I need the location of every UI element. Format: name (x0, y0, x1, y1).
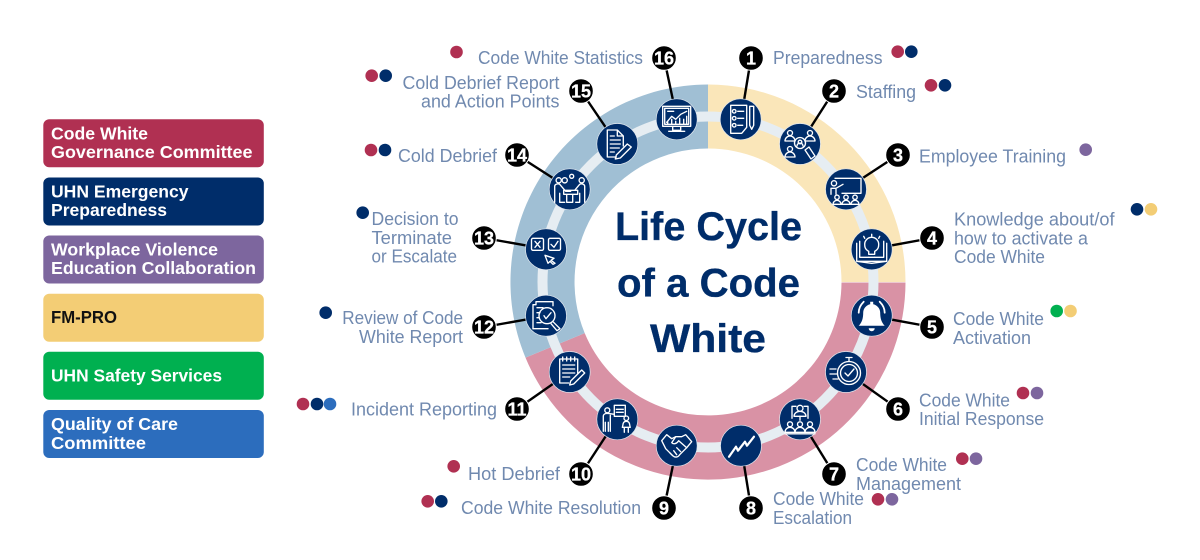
step 11: Incident Reporting (297, 352, 590, 421)
legend item: Workplace Violence Education Collaboration: Workplace Violence (51, 240, 218, 260)
step 9: Code White Resolution (421, 425, 697, 520)
owner dots (365, 144, 391, 156)
label: Code White Management: Code White (856, 454, 947, 475)
legend item: Code White Governance Committee (43, 119, 264, 167)
owner dots (1017, 387, 1043, 399)
owner dot (356, 206, 369, 219)
icon: command team (785, 405, 815, 434)
icon: decision boxes and cursor (532, 238, 560, 264)
label: Cold Debrief Report and Action Points: and Action Points (421, 91, 560, 112)
icon: book and light bulb (857, 234, 887, 263)
number badge 10 (569, 462, 593, 486)
step 1: Preparedness (720, 45, 918, 140)
legend item: Workplace Violence Education Collaboration (43, 236, 264, 284)
label: Review of Code White Report (342, 307, 463, 347)
owner dots (1050, 305, 1077, 317)
number badge 5 (920, 315, 944, 339)
number badge 3 (886, 143, 910, 167)
title: of a Code (617, 262, 800, 306)
icon: document and pen (607, 130, 631, 159)
number badge 14 (505, 143, 529, 167)
legend item: FM-PRO: FM-PRO (51, 307, 117, 327)
legend (43, 119, 264, 458)
number badge 3: 3 (893, 145, 903, 165)
number badge 5: 5 (927, 317, 937, 337)
number badge 4 (920, 226, 944, 250)
label: Knowledge about/of how to activate a Code White (954, 208, 1115, 267)
number badge 11 (505, 397, 529, 421)
icon: staff network (785, 130, 815, 159)
number badge 14: 14 (507, 145, 527, 165)
owner dot (450, 46, 463, 58)
ring segment: pink phase (526, 282, 906, 480)
label: Decision to Terminate or Escalate: Terminate (372, 227, 452, 248)
label: Code White Activation (953, 308, 1044, 348)
number badge 12 (472, 315, 496, 339)
number badge 15 (569, 79, 593, 103)
legend item: UHN Safety Services (43, 352, 264, 400)
label: Code White Management (856, 454, 961, 494)
icon: monitor with statistics (663, 106, 691, 131)
title (615, 205, 802, 361)
ring track (542, 116, 874, 448)
label: Code White Escalation (773, 488, 864, 528)
label: Knowledge about/of how to activate a Code White: how to activate a (954, 227, 1089, 248)
number badge 13: 13 (474, 228, 494, 248)
icon: notepad and pencil (560, 357, 585, 385)
step 12: Review of Code White Report (319, 295, 566, 347)
legend item: UHN Emergency Preparedness: UHN Emergency (51, 182, 189, 202)
legend item: UHN Emergency Preparedness: Preparedness (51, 200, 167, 220)
number badge 13 (472, 226, 496, 250)
label: Code White Resolution: Code White Resolution (461, 497, 641, 518)
icon: alarm bell (859, 302, 885, 331)
step 8: Code White Escalation (720, 425, 898, 528)
legend item: Quality of Care Committee (43, 410, 264, 458)
title: White (650, 317, 766, 361)
owner dots (365, 69, 392, 82)
label: Code White Initial Response: Initial Response (919, 408, 1044, 429)
label: Review of Code White Report: Review of Code (342, 307, 463, 328)
owner dots (925, 79, 951, 92)
step 13: Decision to Terminate or Escalate (356, 206, 566, 270)
step 4: Knowledge about/of how to activate a Code White (851, 203, 1157, 270)
label: Code White Activation: Code White (953, 308, 1044, 329)
label: Code White Management: Management (856, 473, 961, 494)
icon: two people at a chart (603, 405, 630, 432)
label: Code White Initial Response: Code White (919, 389, 1010, 410)
number badge 7 (822, 462, 846, 486)
label: Decision to Terminate or Escalate: or Escalate (372, 246, 457, 267)
label: Hot Debrief: Hot Debrief (468, 463, 561, 484)
owner dot (319, 306, 332, 319)
owner dots (1131, 203, 1157, 216)
label: Incident Reporting: Incident Reporting (351, 399, 497, 420)
label: Decision to Terminate or Escalate: Decision to (372, 208, 458, 229)
step 7: Code White Management (780, 399, 982, 494)
icon: classroom trainer (831, 178, 861, 204)
label: Code White Initial Response (919, 389, 1044, 429)
number badge 8: 8 (746, 498, 756, 518)
number badge 11: 11 (507, 399, 527, 419)
legend item: Workplace Violence Education Collaboration: Education Collaboration (51, 258, 256, 278)
label: Cold Debrief Report and Action Points: Cold Debrief Report (402, 72, 560, 93)
owner dots (421, 495, 448, 508)
legend item: UHN Emergency Preparedness (43, 178, 264, 226)
label: Code White Escalation: Escalation (773, 507, 852, 528)
label: Employee Training: Employee Training (919, 146, 1066, 167)
icon: document review magnifier (533, 302, 560, 331)
legend item: Quality of Care Committee: Quality of Care (51, 414, 178, 434)
label: Staffing: Staffing (856, 81, 916, 102)
title: Life Cycle (615, 205, 802, 249)
label: Cold Debrief: Cold Debrief (398, 145, 498, 166)
label: Code White Escalation: Code White (773, 488, 864, 509)
number badge 9: 9 (659, 498, 669, 518)
label: Preparedness: Preparedness (773, 47, 882, 68)
label: Knowledge about/of how to activate a Code White: Knowledge about/of (954, 208, 1115, 230)
owner dot (447, 460, 460, 473)
step 5: Code White Activation (851, 295, 1077, 348)
legend item: Code White Governance Committee: Governance Committee (51, 142, 253, 162)
owner dots (956, 452, 982, 465)
number badge 16 (652, 46, 676, 70)
legend item: Quality of Care Committee: Committee (51, 433, 146, 453)
number badge 6: 6 (893, 399, 903, 419)
label: Knowledge about/of how to activate a Code White: Code White (954, 246, 1045, 267)
ring: life cycle phases (510, 84, 906, 480)
step 3: Employee Training (826, 143, 1092, 210)
legend item: Code White Governance Committee: Code White (51, 124, 148, 144)
step 2: Staffing (780, 79, 951, 164)
icon: handshake (662, 435, 692, 457)
step 6: Code White Initial Response (826, 352, 1044, 429)
label: Cold Debrief Report and Action Points (402, 72, 560, 112)
number badge 8 (739, 496, 763, 520)
number badge 16: 16 (654, 48, 674, 68)
legend item: UHN Safety Services: UHN Safety Services (51, 366, 222, 386)
number badge 6 (886, 397, 910, 421)
label: Code White Activation: Activation (953, 327, 1031, 348)
number badge 15: 15 (571, 81, 591, 101)
ring segment: blue phase (510, 84, 708, 358)
number badge 2 (822, 79, 846, 103)
owner dot (1079, 143, 1092, 156)
number badge 12: 12 (474, 317, 494, 337)
owner dots (297, 398, 336, 410)
step 14: Cold Debrief (365, 143, 590, 210)
label: Code White Statistics: Code White Statistics (478, 47, 643, 68)
icon: checklist and pen (731, 105, 754, 133)
legend item: FM-PRO (43, 294, 264, 342)
number badge 10: 10 (571, 464, 591, 484)
icon: stopwatch (830, 358, 860, 384)
number badge 9 (652, 496, 676, 520)
step 16: Code White Statistics (450, 46, 697, 140)
step 15: Cold Debrief Report and Action Points (365, 69, 638, 164)
icon: rising zigzag line (729, 437, 754, 457)
number badge 4: 4 (927, 228, 937, 248)
step 10: Hot Debrief (447, 399, 638, 486)
number badge 1: 1 (746, 48, 756, 68)
owner dots (872, 493, 898, 506)
owner dots (891, 45, 918, 58)
label: Decision to Terminate or Escalate (372, 208, 458, 267)
ring segment: yellow phase (708, 84, 906, 282)
number badge 2: 2 (829, 81, 839, 101)
number badge 1 (739, 46, 763, 70)
label: Review of Code White Report: White Report (359, 326, 463, 347)
number badge 7: 7 (829, 464, 839, 484)
icon: group meeting (555, 174, 585, 202)
